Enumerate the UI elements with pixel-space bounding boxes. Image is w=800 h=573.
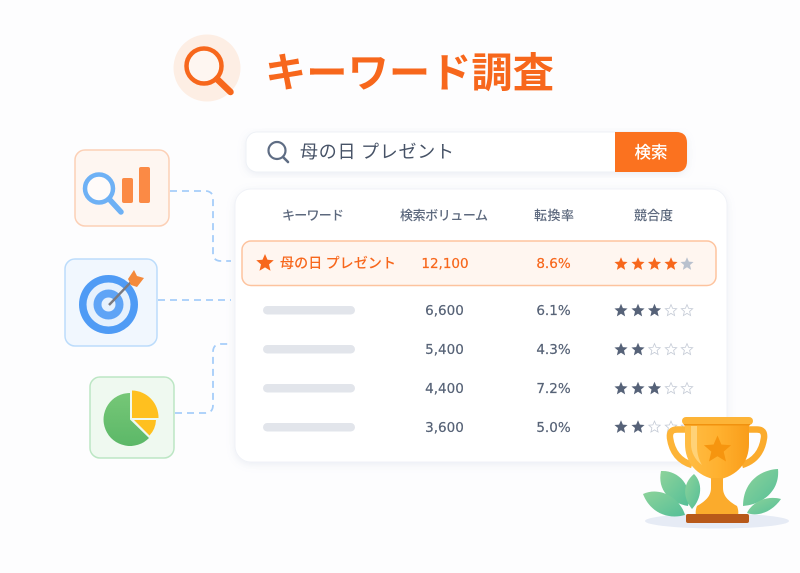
row 5: 5.0% (536, 420, 571, 436)
highlighted row: 母の日 プレゼント (280, 253, 396, 273)
star on cup (704, 436, 731, 462)
row 3 (263, 342, 693, 358)
search bar (246, 132, 687, 172)
leaves (643, 469, 781, 516)
row 3: 5,400 (425, 342, 464, 358)
row 5 (263, 420, 693, 436)
table header: 転換率 (534, 205, 574, 224)
connector: target icon to table (158, 299, 231, 301)
icon: search (268, 142, 288, 162)
row 3: 4.3% (536, 342, 571, 358)
row 4: 4,400 (425, 381, 464, 397)
handles (670, 430, 692, 465)
rating: 4 of 5 (614, 257, 694, 270)
highlighted row (242, 241, 716, 286)
panel: pie chart icon (90, 377, 174, 458)
table header: 検索ボリューム (400, 205, 488, 224)
connector: pie icon to table (175, 344, 231, 413)
panel: keyword table (235, 189, 727, 462)
icon: trophy with leaves (643, 417, 789, 528)
table header: キーワード (282, 205, 344, 224)
row 2: 6.1% (536, 303, 571, 319)
search button: 検索 (634, 139, 668, 163)
panel: chart icon (75, 150, 169, 226)
search query: 母の日 プレゼント (300, 138, 454, 164)
connector: top icon to highlighted row (170, 191, 231, 261)
cup (685, 424, 749, 480)
row 2: 6,600 (425, 303, 464, 319)
row 4 (263, 381, 693, 397)
search button (615, 132, 687, 172)
panel: target icon (65, 259, 157, 346)
title: キーワード調査 (265, 39, 554, 99)
row 2 (263, 303, 693, 319)
highlighted row: 8.6% (536, 256, 571, 272)
table header: 競合度 (634, 205, 673, 224)
highlighted row: 12,100 (421, 256, 469, 272)
row 4: 7.2% (536, 381, 571, 397)
icon: title magnifier (174, 34, 240, 102)
table header (282, 205, 673, 224)
stem and base (696, 478, 738, 515)
row 5: 3,600 (425, 420, 464, 436)
